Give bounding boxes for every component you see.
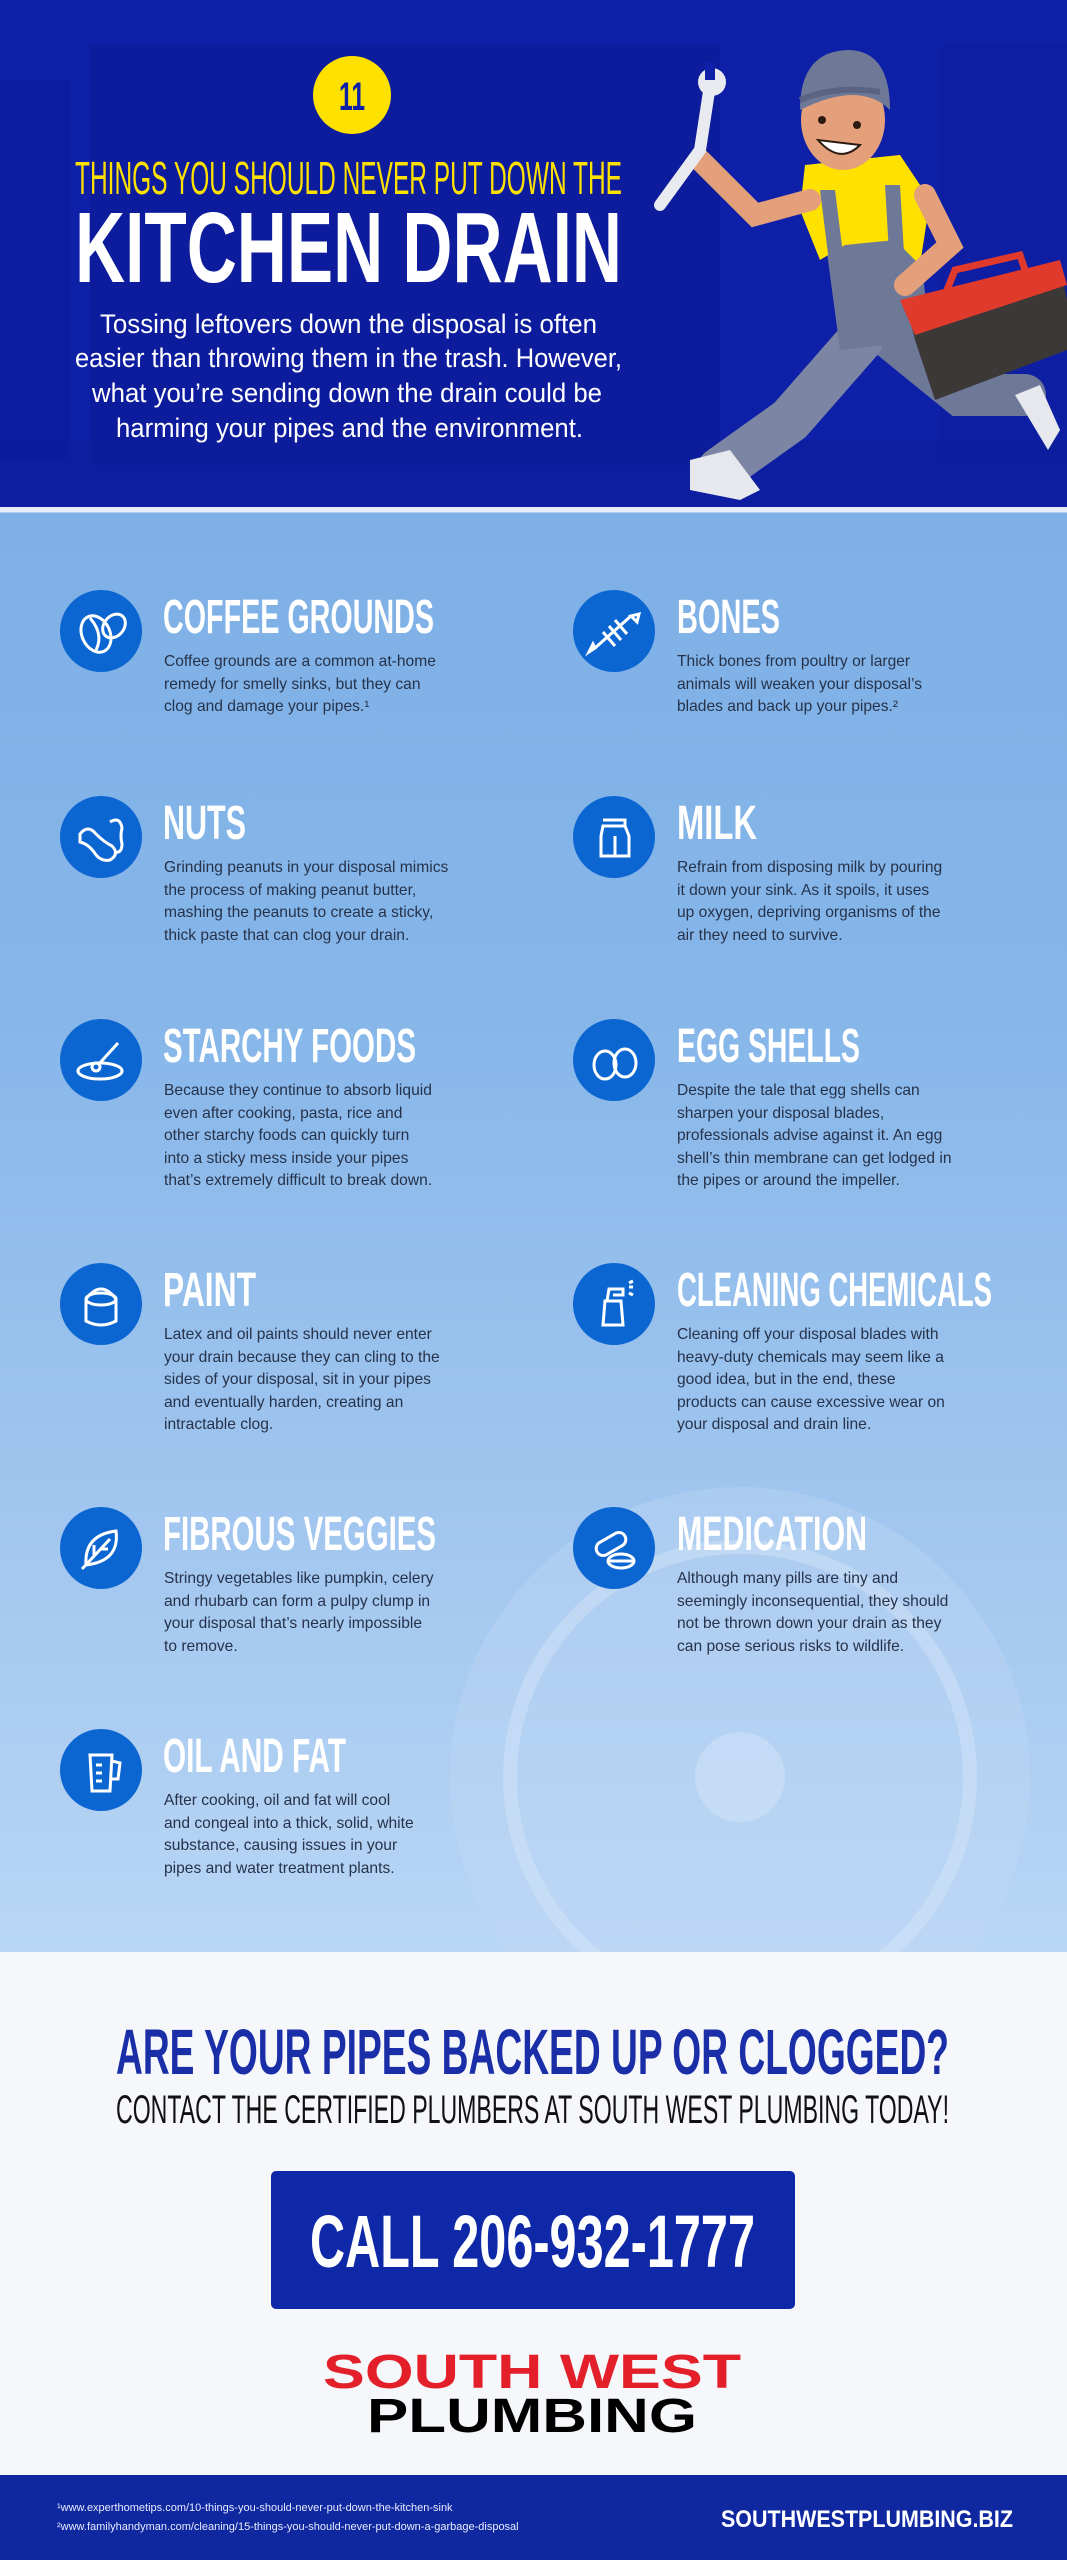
text: shell’s thin membrane can get lodged in	[677, 1150, 952, 1166]
item: coffee grounds	[60, 590, 436, 715]
text: mashing the peanuts to create a sticky,	[164, 904, 433, 921]
item: starchy foods	[60, 1019, 432, 1189]
call button	[271, 2171, 795, 2309]
text: your drain because they can cling to the	[164, 1348, 440, 1366]
text: up oxygen, depriving organisms of the	[677, 904, 941, 921]
text: seemingly inconsequential, they should	[677, 1592, 948, 1610]
text: Although many pills are tiny and	[677, 1570, 898, 1587]
text: to remove.	[164, 1638, 238, 1654]
text: Latex and oil paints should never enter	[164, 1326, 432, 1343]
text: air they need to survive.	[677, 926, 843, 944]
text: animals will weaken your disposal’s	[677, 676, 922, 692]
text: Thick bones from poultry or larger	[677, 653, 910, 670]
text: and eventually harden, creating an	[164, 1394, 403, 1410]
item: bones	[573, 590, 922, 715]
text: pipes and water treatment plants.	[164, 1860, 395, 1876]
content panel	[0, 507, 1067, 1952]
intro text: what you’re sending down the drain could be	[91, 378, 602, 408]
text: Cleaning off your disposal blades with	[677, 1326, 938, 1343]
icon: paint can	[60, 1263, 142, 1345]
text: thick paste that can clog your drain.	[164, 926, 409, 944]
icon: pills	[573, 1507, 655, 1589]
text: substance, causing issues in your	[164, 1837, 397, 1854]
header panel	[0, 0, 1067, 507]
text	[164, 1570, 434, 1654]
item: medication	[573, 1507, 948, 1654]
text	[164, 1792, 414, 1876]
text: and rhubarb can form a pulpy clump in	[164, 1592, 430, 1610]
text: your disposal that’s nearly impossible	[164, 1615, 422, 1632]
icon: leaf	[60, 1507, 142, 1589]
footnotes: ²www.familyhandyman.com/cleaning/15-things-you-should-never-put-down-a-garbage-disposal	[57, 2521, 519, 2533]
text	[164, 1082, 432, 1189]
text: After cooking, oil and fat will cool	[164, 1792, 390, 1809]
icon: milk carton	[573, 796, 655, 878]
text: Grinding peanuts in your disposal mimics	[164, 859, 448, 876]
item: oil and fat	[60, 1729, 414, 1876]
text: blades and back up your pipes.²	[677, 698, 898, 715]
text: professionals advise against it. An egg	[677, 1127, 942, 1144]
text: sides of your disposal, sit in your pipes	[164, 1371, 431, 1388]
text: Because they continue to absorb liquid	[164, 1082, 432, 1099]
icon: measuring cup	[60, 1729, 142, 1811]
text: products can cause excessive wear on	[677, 1394, 945, 1410]
text: remedy for smelly sinks, but they can	[164, 676, 421, 692]
text: Despite the tale that egg shells can	[677, 1082, 920, 1099]
text	[164, 653, 436, 715]
illustration: plumber	[654, 50, 1067, 500]
text: the pipes or around the impeller.	[677, 1172, 900, 1189]
item: fibrous veggies	[60, 1507, 436, 1654]
icon: bowl and spoon	[60, 1019, 142, 1101]
text	[677, 653, 922, 715]
item: milk	[573, 796, 942, 944]
text: your disposal and drain line.	[677, 1416, 871, 1433]
icon: spray bottle	[573, 1263, 655, 1345]
logo	[323, 2348, 741, 2438]
item: nuts	[60, 796, 448, 944]
item: egg shells	[573, 1019, 952, 1189]
text	[164, 859, 448, 944]
footnotes: ¹www.experthometips.com/10-things-you-should-never-put-down-the-kitchen-sink	[57, 2502, 453, 2514]
text: it down your sink. As it spoils, it uses	[677, 882, 929, 898]
text: even after cooking, pasta, rice and	[164, 1104, 402, 1122]
text: the process of making peanut butter,	[164, 882, 416, 898]
icon: fish bone	[573, 590, 655, 672]
item: paint	[60, 1263, 440, 1433]
icon: coffee beans	[60, 590, 142, 672]
text: good idea, but in the end, these	[677, 1371, 896, 1388]
badge: 11	[313, 56, 391, 134]
text: Stringy vegetables like pumpkin, celery	[164, 1570, 434, 1587]
CTA heading	[116, 2020, 949, 2130]
intro text: harming your pipes and the environment.	[116, 413, 583, 443]
footnotes	[57, 2502, 519, 2533]
text: sharpen your disposal blades,	[677, 1104, 884, 1122]
intro text: Tossing leftovers down the disposal is often	[100, 309, 597, 339]
text: heavy-duty chemicals may seem like a	[677, 1348, 944, 1366]
text: and congeal into a thick, solid, white	[164, 1814, 414, 1832]
text	[677, 1570, 948, 1654]
icon: eggs	[573, 1019, 655, 1101]
badge: 11: 11	[339, 75, 365, 119]
intro text	[75, 309, 622, 443]
text: into a sticky mess inside your pipes	[164, 1150, 408, 1166]
text	[677, 859, 942, 944]
text: can pose serious risks to wildlife.	[677, 1638, 904, 1654]
text: Refrain from disposing milk by pouring	[677, 859, 942, 876]
text: other starchy foods can quickly turn	[164, 1127, 409, 1144]
text	[677, 1082, 952, 1189]
text: not be thrown down your drain as they	[677, 1615, 941, 1632]
text	[677, 1326, 945, 1433]
text: intractable clog.	[164, 1416, 273, 1433]
item: cleaning chemicals	[573, 1263, 992, 1433]
text	[164, 1326, 440, 1433]
text: clog and damage your pipes.¹	[164, 698, 369, 715]
footer bar	[0, 2475, 1067, 2560]
text: Coffee grounds are a common at-home	[164, 653, 436, 670]
icon: peanuts	[60, 796, 142, 878]
text: that’s extremely difficult to break down.	[164, 1172, 432, 1189]
